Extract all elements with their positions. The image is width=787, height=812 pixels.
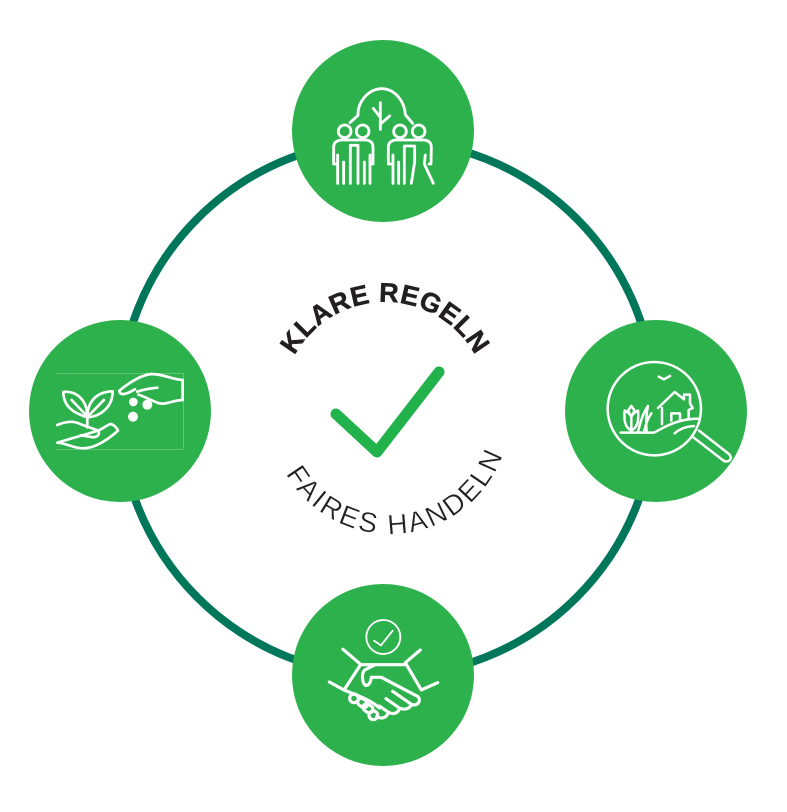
- icon: handshake with check badge: [329, 620, 438, 720]
- panel: community icon circle: [292, 40, 474, 222]
- icon: people under tree: [334, 89, 433, 183]
- icon: magnifier over farmhouse: [608, 362, 731, 462]
- heading: Klare Regeln: KLARE REGELN: [280, 282, 490, 354]
- ring: [119, 140, 655, 676]
- icon: central check mark: [336, 372, 439, 452]
- subheading: Faires Handeln: FAIRES HANDELN: [286, 450, 502, 534]
- panel: plant and seeds icon circle: [29, 320, 211, 502]
- icon: hand with plant and hand with seeds: [57, 373, 183, 449]
- panel: magnifier icon circle: [565, 320, 747, 502]
- panel: handshake icon circle: [292, 584, 474, 766]
